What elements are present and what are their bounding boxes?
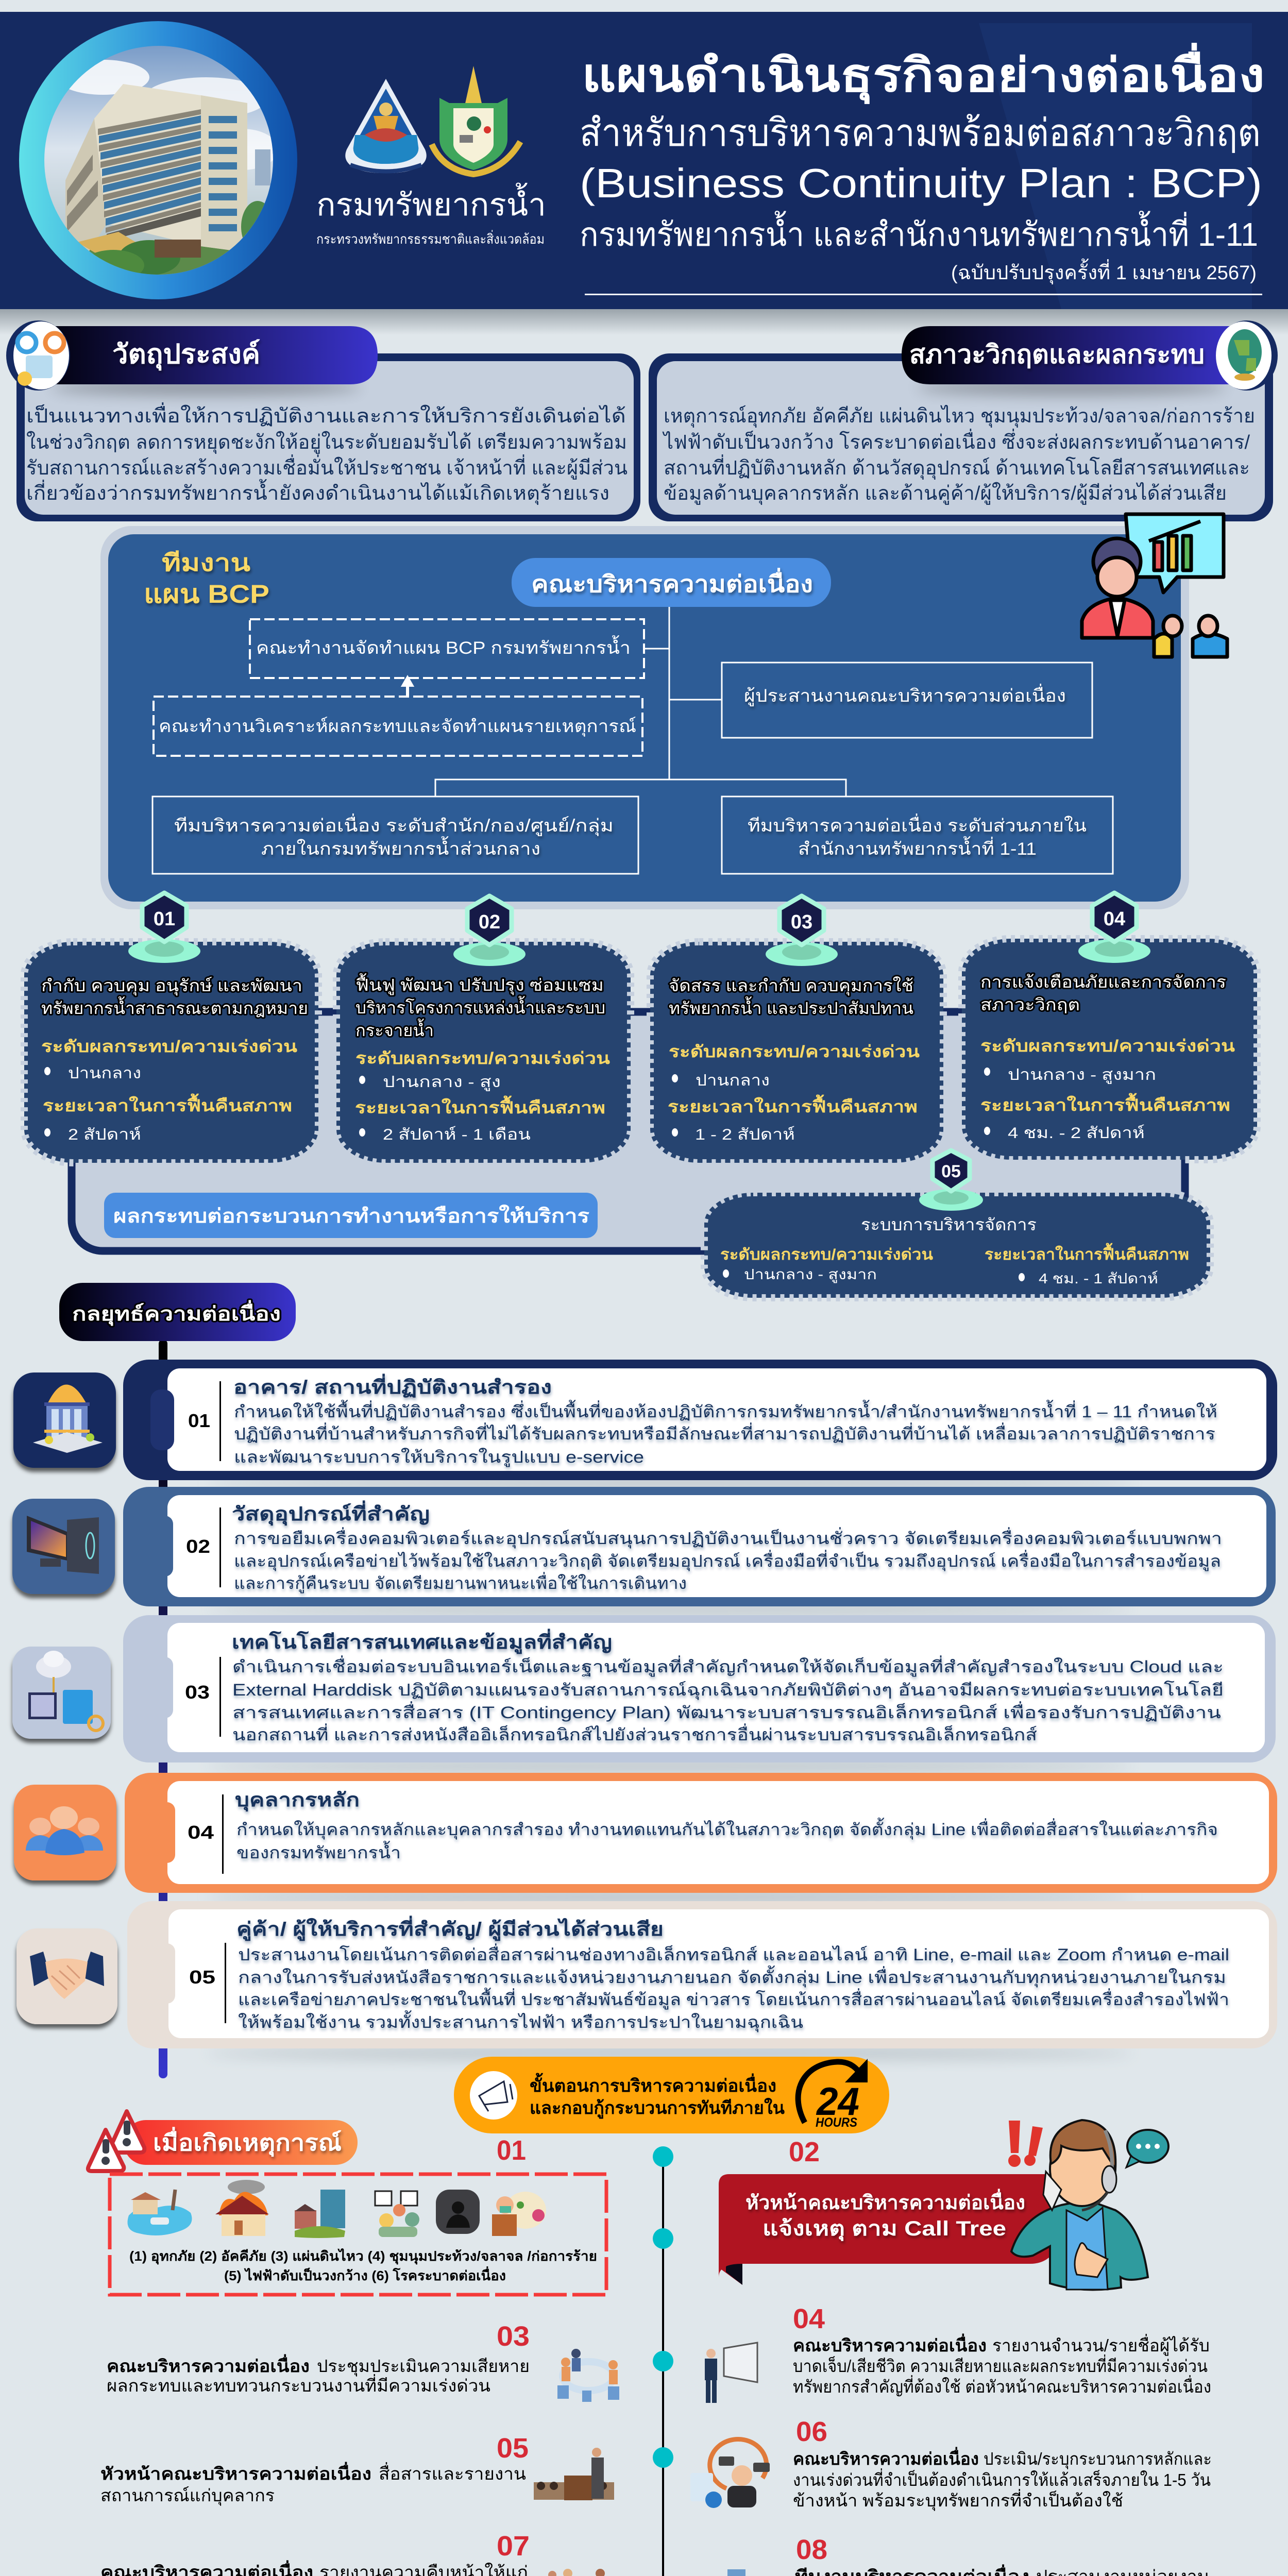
card 02: restore: บริหารโครงการแหล่งน้ำและระบบ	[355, 996, 605, 1017]
card 04: warning: ระดับผลกระทบ/ความเร่งด่วน	[980, 1037, 1235, 1055]
crisis heading pill: สภาวะวิกฤตและผลกระทบ	[909, 340, 1205, 369]
card 01: regulate	[24, 942, 318, 1163]
card 03: allocate: จัดสรร และกำกับ ควบคุมการใช้	[669, 976, 913, 996]
logo: ministry emblem	[432, 66, 520, 174]
icon: 24 hours clock arrow: 24	[816, 2080, 859, 2124]
step 04: บาดเจ็บ/เสียชีวิต ความเสียหายและผลกระทบที่มีความเร่งด่วน	[793, 2354, 1208, 2376]
step 07	[100, 2531, 530, 2576]
step 08: 08	[796, 2534, 827, 2565]
title: กรมทรัพยากรน้ำ และสำนักงานทรัพยากรน้ำที่ 1-11	[580, 211, 1258, 253]
objective text	[26, 402, 628, 505]
strategy row 01: building: กำหนดให้ใช้พื้นที่ปฏิบัติงานสำรอง ซึ่งเป็นพื้นที่ของห้องปฏิบัติการกรมทรัพยากรน้ำ/สำนักงานทรัพยากรน้ำที่ 1 – 11 กำหนดให้	[234, 1400, 1217, 1421]
card 05: management systems: 4 ชม. - 1 สัปดาห์	[1039, 1270, 1158, 1286]
icon: call agent person	[1011, 2120, 1148, 2290]
strategy row 04: personnel: บุคลากรหลัก	[235, 1789, 360, 1812]
box: coordinator	[722, 663, 1092, 738]
step 04: คณะบริหารความต่อเนื่อง	[793, 2333, 987, 2355]
step 06	[793, 2416, 1212, 2511]
step 05: หัวหน้าคณะบริหารความต่อเนื่อง	[100, 2462, 371, 2483]
card 03: allocate: 1 - 2 สัปดาห์	[695, 1126, 795, 1143]
incident types dashed box: (1) อุทกภัย (2) อัคคีภัย (3) แผ่นดินไหว (4) ชุมนุมประท้วง/จลาจล /ก่อการร้าย	[129, 2248, 597, 2265]
objective text: รับสถานการณ์และสร้างความเชื่อมั่นให้ประชาชน เจ้าหน้าที่ และผู้มีส่วน	[26, 454, 628, 480]
card 02: restore: ปานกลาง - สูง	[383, 1074, 501, 1091]
icon: protest	[375, 2191, 419, 2237]
impact button: ผลกระทบต่อกระบวนการทำงานหรือการให้บริการ	[113, 1205, 590, 1227]
step 04: ทรัพยากรสำคัญที่ต้องใช้ ต่อหัวหน้าคณะบริหารความต่อเนื่อง	[793, 2375, 1211, 2396]
strategy row 05: partners: 05	[189, 1967, 215, 1988]
step 03: คณะบริหารความต่อเนื่อง	[107, 2354, 310, 2376]
card 04: warning: การแจ้งเตือนภัยและการจัดการ	[980, 973, 1226, 991]
card 03: allocate: ระยะเวลาในการฟื้นคืนสภาพ	[668, 1094, 918, 1116]
step 05	[100, 2433, 529, 2506]
icon: objective circle	[6, 320, 70, 391]
strategy row 03: IT: ดำเนินการเชื่อมต่อระบบอินเทอร์เน็ตและฐานข้อมูลที่สำคัญกำหนดให้จัดเก็บข้อมูลที่สำคัญสำรองในระบบ Cloud และ	[232, 1655, 1224, 1677]
strategy row 05: partners: ประสานงานโดยเน้นการติดต่อสื่อสารผ่านช่องทางอิเล็กทรอนิกส์ และออนไลน์ อาทิ Line, e-mail และ Zoom กำหนด e-mail	[238, 1943, 1229, 1964]
24 hours pill	[454, 2057, 889, 2133]
step 06: งานเร่งด่วนที่จำเป็นต้องดำเนินการให้แล้วเสร็จภายใน 1-5 วัน	[793, 2468, 1211, 2489]
24 hours pill: ขั้นตอนการบริหารความต่อเนื่อง	[530, 2073, 776, 2096]
pin 04: 04	[1104, 908, 1125, 930]
card 05: management systems: ปานกลาง - สูงมาก	[744, 1266, 877, 1283]
icon: earthquake	[295, 2190, 345, 2238]
objective text: เกี่ยวข้องว่ากรมทรัพยากรน้ำยังคงดำเนินงานได้แม้เกิดเหตุร้ายแรง	[26, 479, 609, 505]
box: regional team: ทีมบริหารความต่อเนื่อง ระดับส่วนภายใน	[748, 814, 1087, 836]
box: central team	[152, 796, 638, 874]
strategy row 02: equipment: และอุปกรณ์เครือข่ายไว้พร้อมใช้ในสภาวะวิกฤติ จัดเตรียมอุปกรณ์ เครื่องมือที่จำเป็น รวมถึงอุปกรณ์ เครื่องมือในการสำรองข้อมูล	[234, 1550, 1221, 1571]
step 03: ประชุมประเมินความเสียหาย	[317, 2357, 530, 2377]
crisis heading pill	[902, 326, 1248, 395]
card 03: allocate	[650, 942, 943, 1163]
strategy row 01: building: ปฏิบัติงานที่บ้านสำหรับภารกิจที่ไม่ได้รับผลกระทบหรือมีลักษณะที่สามารถปฏิบัติงานที่บ้านได้ เหลื่อมเวลาการปฏิบัติราชการ	[234, 1422, 1215, 1443]
icon: fire	[215, 2180, 269, 2236]
card 02: restore: กระจายน้ำ	[355, 1019, 434, 1040]
objective heading pill: วัตถุประสงค์	[112, 339, 260, 371]
icon: coordination offices	[693, 2569, 766, 2576]
card 02: restore	[336, 942, 631, 1163]
strategy row 02: equipment	[123, 1487, 1276, 1615]
incident heading pill	[88, 2111, 358, 2171]
strategy row 05: partners	[127, 1901, 1277, 2059]
arrow: analysis to BCP group	[403, 678, 412, 696]
strategy row 04: personnel: 04	[188, 1822, 214, 1843]
step 02 banner	[719, 2137, 1055, 2285]
card 03: allocate: ระดับผลกระทบ/ความเร่งด่วน	[669, 1042, 920, 1061]
steps timeline line	[662, 2157, 664, 2576]
icon: presenter at board	[705, 2343, 757, 2403]
icon: warning triangles	[88, 2111, 144, 2171]
icon: blackout	[436, 2190, 480, 2234]
card 01: regulate: ระยะเวลาในการฟื้นคืนสภาพ	[43, 1093, 292, 1115]
incident heading pill: เมื่อเกิดเหตุการณ์	[153, 2127, 342, 2157]
card 04: warning: ระยะเวลาในการฟื้นคืนสภาพ	[980, 1093, 1230, 1114]
icon: three approvers	[548, 2569, 607, 2576]
step 04	[793, 2303, 1211, 2396]
pin 01	[128, 893, 200, 963]
icon: presenter with chart bubble	[1082, 514, 1227, 657]
card 04: warning	[962, 939, 1257, 1160]
committee pill: คณะบริหารความต่อเนื่อง	[531, 568, 813, 597]
icon: meeting table	[557, 2349, 619, 2402]
dashed box: analysis working group	[154, 697, 642, 756]
objective text: ในช่วงวิกฤต ลดการหยุดชะงักให้อยู่ในระดับยอมรับได้ เตรียมความพร้อม	[26, 431, 627, 454]
strategy row 04: personnel	[125, 1773, 1277, 1903]
card 02: restore: ระดับผลกระทบ/ความเร่งด่วน	[355, 1049, 610, 1067]
icon: exclamation marks	[1008, 2121, 1043, 2167]
impact button	[104, 1193, 598, 1238]
impact panel behind mission cards	[72, 1012, 1185, 1251]
panel: objective	[6, 320, 640, 521]
strategy row 03: IT	[123, 1615, 1276, 1772]
pin 01: 01	[154, 908, 175, 930]
card 02: restore: 2 สัปดาห์ - 1 เดือน	[383, 1126, 531, 1143]
department name: กระทรวงทรัพยากรธรรมชาติและสิ่งแวดล้อม	[316, 230, 545, 247]
committee pill	[512, 558, 831, 607]
card 04: warning: สภาวะวิกฤต	[980, 995, 1080, 1014]
icon: 24 hours clock arrow	[798, 2059, 868, 2130]
step 04: รายงานจำนวน/รายชื่อผู้ได้รับ	[992, 2334, 1210, 2356]
step 05: สถานการณ์แก่บุคลากร	[100, 2486, 275, 2506]
step 05: 05	[497, 2433, 529, 2464]
strategy row 05: partners: และเครือข่ายภาคประชาชนในพื้นที่ ประชาสัมพันธ์ข้อมูล ข่าวสาร โดยเน้นการสื่อสารผ่านออนไลน์ จัดเตรียมเครื่องสำรองไฟฟ้า	[238, 1988, 1229, 2010]
department name: กรมทรัพยากรน้ำ	[316, 182, 546, 222]
crisis text: ข้อมูลด้านบุคลากรหลัก และด้านคู่ค้า/ผู้ให้บริการ/ผู้มีส่วนได้ส่วนเสีย	[664, 482, 1227, 505]
strategy row 04: personnel: ของกรมทรัพยากรน้ำ	[236, 1841, 401, 1862]
strategy row 03: IT: สารสนเทศและการสื่อสาร (IT Contingency Plan) พัฒนาระบบสารบรรณอิเล็กทรอนิกส์ เพื่อรองรับการปฏิบัติงาน	[232, 1701, 1221, 1722]
pin 03	[766, 896, 838, 966]
strategy timeline bar	[159, 1340, 167, 2078]
strategy row 02: equipment: การขอยืมเครื่องคอมพิวเตอร์และอุปกรณ์สนับสนุนการปฏิบัติงานเป็นงานชั่วคราว จัดเตรียมเครื่องคอมพิวเตอร์แบบพกพา	[234, 1527, 1222, 1549]
box: coordinator: ผู้ประสานงานคณะบริหารความต่อเนื่อง	[744, 684, 1066, 706]
strategy heading pill: กลยุทธ์ความต่อเนื่อง	[72, 1300, 281, 1326]
card 03: allocate: ปานกลาง	[696, 1072, 770, 1089]
box: regional team: สำนักงานทรัพยากรน้ำที่ 1-11	[798, 836, 1037, 859]
pin 05	[919, 1150, 983, 1211]
pin 04	[1078, 893, 1150, 963]
card 02: restore: ฟื้นฟู พัฒนา ปรับปรุง ซ่อมแซม	[355, 973, 604, 995]
strategy row 02: equipment: 02	[186, 1536, 210, 1557]
title: แผนดำเนินธุรกิจอย่างต่อเนื่อง	[582, 43, 1265, 105]
strategy row 02: equipment: วัสดุอุปกรณ์ที่สำคัญ	[232, 1500, 430, 1526]
step 08	[795, 2534, 1212, 2576]
icon tile: handshake	[16, 1928, 117, 2024]
strategy row 01: building: และพัฒนาระบบการให้บริการในรูปแบบ e-service	[234, 1448, 644, 1467]
dashed box: analysis working group: คณะทำงานวิเคราะห์ผลกระทบและจัดทำแผนรายเหตุการณ์	[159, 717, 636, 737]
icon: globe circle	[1216, 320, 1278, 391]
box: central team: ภายในกรมทรัพยากรน้ำส่วนกลาง	[261, 836, 540, 859]
crisis text	[662, 405, 1255, 505]
title: สำหรับการบริหารความพร้อมต่อสภาวะวิกฤต	[580, 111, 1261, 154]
crisis text: เหตุการณ์อุทกภัย อัคคีภัย แผ่นดินไหว ชุมนุมประท้วง/จลาจล/ก่อการร้าย	[664, 405, 1255, 428]
title: (ฉบับปรับปรุงครั้งที่ 1 เมษายน 2567)	[951, 258, 1257, 284]
card 02: restore: ระยะเวลาในการฟื้นคืนสภาพ	[355, 1095, 605, 1117]
step 03: ผลกระทบและทบทวนกระบวนงานที่มีความเร่งด่วน	[107, 2374, 490, 2395]
step 06: ประเมิน/ระบุกระบวนการหลักและ	[984, 2449, 1212, 2469]
pin 02: 02	[479, 911, 500, 933]
crisis text: สถานที่ปฏิบัติงานหลัก ด้านวัสดุอุปกรณ์ ด้านเทคโนโลยีสารสนเทศและ	[664, 454, 1250, 480]
card 05: management systems: ระดับผลกระทบ/ความเร่งด่วน	[720, 1246, 934, 1263]
step 05: สื่อสารและรายงาน	[379, 2462, 526, 2483]
box: regional team	[722, 796, 1113, 874]
card 04: warning: ปานกลาง - สูงมาก	[1008, 1066, 1156, 1084]
pin 05: 05	[941, 1162, 961, 1181]
step 06: ข้างหน้า พร้อมระบุทรัพยากรที่จำเป็นต้องใช้	[793, 2489, 1123, 2511]
team heading: แผน BCP	[144, 580, 269, 608]
dashed box: BCP working group: คณะทำงานจัดทำแผน BCP กรมทรัพยากรน้ำ	[256, 635, 631, 658]
strategy row 05: partners: ให้พร้อมใช้งาน รวมทั้งประสานการไฟฟ้า หรือการประปาในยามฉุกเฉิน	[238, 2010, 803, 2032]
pin 03: 03	[791, 911, 812, 933]
team heading: ทีมงาน	[162, 549, 251, 576]
card 01: regulate: กำกับ ควบคุม อนุรักษ์ และพัฒนา	[41, 976, 302, 996]
strategy row 03: IT: 03	[185, 1682, 210, 1703]
step 06: 06	[796, 2416, 827, 2447]
card 01: regulate: 2 สัปดาห์	[68, 1126, 141, 1143]
step 02 banner: 02	[789, 2137, 820, 2167]
icon tile: cloud and server	[12, 1647, 111, 1739]
icon: speaker at podium	[534, 2448, 614, 2500]
logo: department of water resources	[345, 79, 427, 173]
card 04: warning: 4 ชม. - 2 สัปดาห์	[1008, 1124, 1145, 1142]
strategy row 04: personnel: กำหนดให้บุคลากรหลักและบุคลากรสำรอง ทำงานทดแทนกันได้ในสภาวะวิกฤต จัดตั้งกลุ่ม Line เพื่อติดต่อสื่อสารในแต่ละภารกิจ	[236, 1818, 1218, 1840]
panel: crisis and impact	[649, 320, 1278, 521]
strategy heading pill	[59, 1283, 296, 1341]
strategy row 01: building	[123, 1360, 1277, 1488]
title	[580, 43, 1265, 295]
dashed box: BCP working group	[250, 619, 644, 678]
team heading	[144, 549, 269, 608]
card 03: allocate: ทรัพยากรน้ำ และประปาสัมปทาน	[669, 996, 913, 1018]
card 01: regulate: ทรัพยากรน้ำสาธารณะตามกฎหมาย	[41, 996, 308, 1018]
24 hours pill: และกอบกู้กระบวนการทันทีภายใน	[530, 2097, 785, 2119]
icon: flood	[128, 2190, 192, 2235]
strategy row 03: IT: External Harddisk ปฏิบัติตามแผนรองรับสถานการณ์ฉุกเฉินจากภัยพิบัติต่างๆ อันอาจมีผลกระทบต่อระบบเทคโนโลยี	[232, 1681, 1224, 1700]
icon tile: building	[13, 1372, 116, 1468]
step 03: 03	[497, 2321, 530, 2352]
icon: assessment manager	[690, 2439, 770, 2508]
icon: epidemic	[492, 2192, 546, 2236]
card 05: management systems	[704, 1193, 1210, 1298]
step 02 banner: แจ้งเหตุ ตาม Call Tree	[762, 2217, 1006, 2242]
card 01: regulate: ระดับผลกระทบ/ความเร่งด่วน	[41, 1037, 297, 1056]
incident types dashed box	[110, 2174, 606, 2295]
card 05: management systems: ระยะเวลาในการฟื้นคืนสภาพ	[985, 1243, 1189, 1263]
icon: 24 hours clock arrow: HOURS	[816, 2115, 857, 2130]
strategy row 05: partners: คู่ค้า/ ผู้ให้บริการที่สำคัญ/ ผู้มีส่วนได้ส่วนเสีย	[236, 1916, 664, 1941]
panel: BCP team org chart	[100, 514, 1227, 909]
step 06: คณะบริหารความต่อเนื่อง	[793, 2447, 979, 2468]
box: central team: ทีมบริหารความต่อเนื่อง ระดับสำนัก/กอง/ศูนย์/กลุ่ม	[174, 814, 614, 836]
icon tile: people	[14, 1785, 116, 1880]
department name	[316, 182, 546, 247]
step 02 banner: หัวหน้าคณะบริหารความต่อเนื่อง	[745, 2189, 1025, 2214]
org chart connectors	[435, 607, 846, 796]
title: (Business Continuity Plan : BCP)	[580, 160, 1262, 206]
icon tile: computer	[12, 1499, 115, 1594]
objective heading pill	[37, 326, 378, 395]
step 07: 07	[497, 2531, 530, 2562]
step 03	[107, 2321, 530, 2395]
strategy row 03: IT: เทคโนโลยีสารสนเทศและข้อมูลที่สำคัญ	[232, 1629, 612, 1654]
crisis text: ไฟฟ้าดับเป็นวงกว้าง โรคระบาดต่อเนื่อง ซึ่งจะส่งผลกระทบด้านอาคาร/	[662, 429, 1250, 453]
icon: megaphone	[479, 2081, 513, 2111]
pin 02	[453, 896, 526, 966]
header photo circle	[19, 21, 297, 299]
objective text: เป็นแนวทางเพื่อให้การปฏิบัติงานและการให้บริการยังเดินต่อได้	[26, 402, 626, 427]
strategy row 02: equipment: และการกู้คืนระบบ จัดเตรียมยานพาหนะเพื่อใช้ในการเดินทาง	[234, 1572, 687, 1594]
step 04: 04	[793, 2303, 825, 2334]
header band	[0, 12, 1288, 335]
strategy row 01: building: อาคาร/ สถานที่ปฏิบัติงานสำรอง	[233, 1374, 552, 1398]
strategy row 01: building: 01	[188, 1410, 210, 1431]
card 01: regulate: ปานกลาง	[68, 1065, 141, 1082]
step 01 number: 01	[497, 2135, 526, 2166]
strategy row 05: partners: กลางในการรับส่งหนังสือราชการและแจ้งหน่วยงานภายนอก จัดตั้งกลุ่ม Line เพื่อประสานงานกับทุกหน่วยงานภายในกรม	[238, 1965, 1226, 1988]
icon: speech bubble	[1126, 2130, 1168, 2167]
timeline dots	[653, 2146, 673, 2576]
strategy row 03: IT: นอกสถานที่ และการส่งหนังสืออิเล็กทรอนิกส์ไปยังส่วนราชการอื่นผ่านระบบสารบรรณอิเล็กทรอนิกส์	[232, 1723, 1037, 1744]
card 05: management systems: ระบบการบริหารจัดการ	[861, 1215, 1037, 1234]
incident types dashed box: (5) ไฟฟ้าดับเป็นวงกว้าง (6) โรคระบาดต่อเนื่อง	[224, 2266, 506, 2283]
